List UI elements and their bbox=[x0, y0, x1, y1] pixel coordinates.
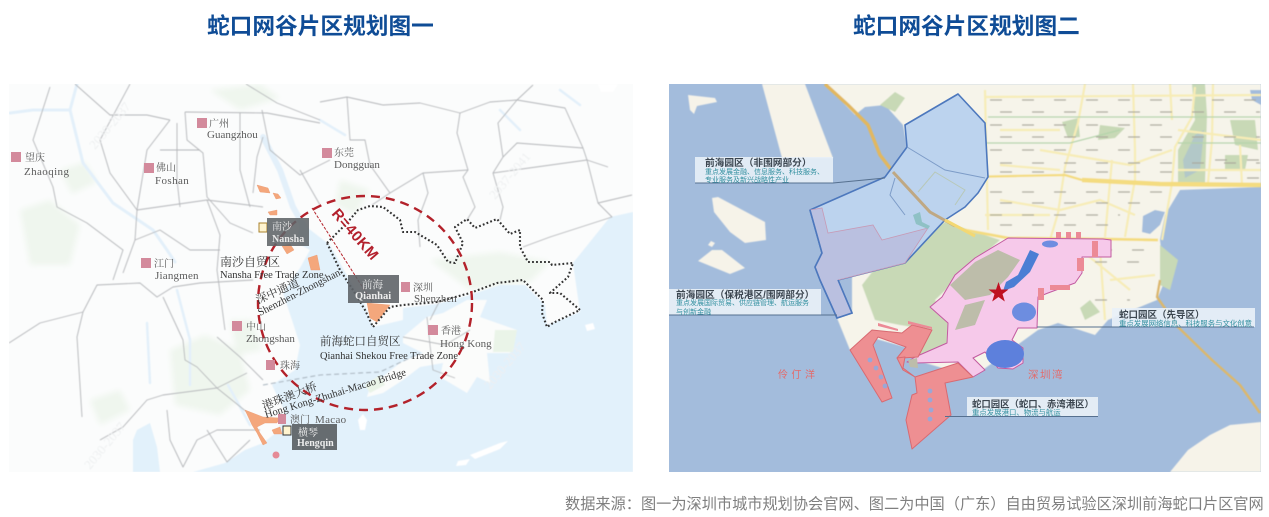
callout: Qianhai non-bonded: 重点发展金融、信息服务、科技服务、 bbox=[705, 167, 824, 176]
city labels bbox=[11, 117, 492, 426]
callout: Qianhai bonded bbox=[669, 288, 837, 316]
label: Foshan: Foshan bbox=[155, 175, 189, 187]
icon: airport dot bbox=[272, 452, 280, 458]
dotted boundary bbox=[327, 206, 580, 327]
callout: Qianhai non-bonded: 前海园区（非围网部分） bbox=[705, 156, 812, 169]
label: Dongguan: Dongguan bbox=[334, 159, 380, 171]
callout: Qianhai bonded: 与创新金融 bbox=[676, 307, 711, 316]
zone: Shekou pink pioneer area bbox=[907, 238, 1111, 377]
watermark: 2030-2037 bbox=[86, 99, 134, 152]
islands bbox=[688, 95, 1261, 472]
coastal highway bbox=[825, 84, 893, 172]
label: Qianhai Shekou free trade zone: 前海蛇口自贸区 bbox=[320, 334, 400, 348]
label: Jiangmen: Jiangmen bbox=[155, 270, 199, 282]
sea bbox=[193, 212, 633, 472]
grey hills bbox=[908, 250, 1020, 368]
label: Foshan: 佛山 bbox=[156, 161, 176, 174]
panel: regional map one bbox=[9, 84, 633, 472]
label: Hong Kong bbox=[428, 324, 492, 350]
watermark: 2037-2041 bbox=[486, 149, 534, 202]
label: Shenzhen-Zhongshan channel: 深中通道 bbox=[254, 275, 302, 307]
marker: Qianhai: 前海 bbox=[362, 278, 383, 291]
callout: Shekou pioneer: 蛇口园区（先导区） bbox=[1119, 309, 1205, 321]
city roads bbox=[985, 84, 1261, 320]
label: radius 40km: R=40KM bbox=[328, 205, 382, 264]
callout: Shekou ports: 重点发展港口、物流与航运 bbox=[972, 408, 1061, 417]
label: Jiangmen bbox=[141, 257, 199, 282]
label: Guangzhou: Guangzhou bbox=[207, 129, 258, 141]
label: Zhaoqing bbox=[11, 151, 69, 178]
label: Zhongshan bbox=[232, 320, 295, 345]
label: Zhongshan: 中山 bbox=[246, 320, 266, 333]
zone: blue circle south bbox=[986, 340, 1024, 368]
label: Hong Kong-Zhuhai-Macao bridge: 港珠澳大桥 bbox=[260, 379, 319, 413]
radius line bbox=[312, 208, 372, 302]
mainland bbox=[825, 84, 1261, 377]
label: Nansha free trade zone: 南沙自贸区 bbox=[220, 254, 280, 269]
callout: Shekou ports bbox=[945, 397, 1098, 417]
label: Zhaoqing: Zhaoqing bbox=[24, 166, 69, 178]
green areas bbox=[862, 84, 1258, 358]
label: Dongguan bbox=[322, 146, 380, 171]
dashed 40km circle bbox=[258, 196, 472, 410]
zone: blue strip bbox=[1003, 250, 1039, 291]
label: Zhuhai bbox=[266, 359, 300, 372]
bridge line bbox=[263, 353, 420, 385]
label: Shenzhen: 深圳 bbox=[413, 281, 433, 294]
label: Hong Kong: 香港 bbox=[441, 324, 461, 337]
callout: Shekou pioneer: 重点发展网络信息、科技服务与文化创意 bbox=[1119, 319, 1252, 328]
label: Qianhai Shekou free trade zone bbox=[320, 334, 458, 362]
label: Qianhai Shekou free trade zone: Qianhai Shekou Free Trade Zone bbox=[320, 351, 458, 362]
sea label: Shenzhen bay: 深圳湾 bbox=[1028, 368, 1064, 381]
label: Nansha free trade zone: Nansha Free Trade Zone bbox=[220, 270, 324, 281]
label: Macao: 澳门 bbox=[290, 413, 310, 426]
red boundary tags bbox=[878, 232, 1098, 331]
sea label: west: 伶仃洋 bbox=[778, 368, 818, 381]
watermark: 2030-2037 bbox=[481, 339, 529, 392]
label: Guangzhou: 广州 bbox=[209, 117, 229, 130]
marker: Hengqin bbox=[283, 424, 337, 450]
rivers bbox=[10, 84, 580, 425]
marker: Qianhai bbox=[348, 275, 399, 303]
bridge road bbox=[1157, 280, 1260, 413]
label: Shenzhen-Zhongshan channel: Shenzhen-Zhongshan bbox=[256, 267, 343, 319]
callout: Qianhai bonded: 重点发展国际贸易、供应链管理、航运服务 bbox=[676, 298, 809, 307]
callout: Shekou ports: 蛇口园区（蛇口、赤湾港区） bbox=[972, 398, 1094, 410]
map place markers bbox=[990, 100, 1261, 300]
callout: Qianhai bonded: 前海园区（保税港区/围网部分） bbox=[676, 288, 814, 301]
zone: Qianhai non-bonded area bbox=[810, 94, 988, 318]
callout: Qianhai non-bonded bbox=[695, 156, 885, 184]
zone: blue circle north bbox=[1012, 302, 1036, 322]
callout: Shekou pioneer bbox=[1037, 308, 1255, 328]
label: Dongguan: 东莞 bbox=[334, 146, 354, 159]
label: Jiangmen: 江门 bbox=[154, 257, 174, 270]
panel: district map two bbox=[669, 84, 1261, 472]
icon: red star bbox=[988, 282, 1008, 302]
map two: land and roads bbox=[688, 84, 1261, 472]
label: Zhuhai: 珠海 bbox=[280, 359, 300, 372]
marker: Hengqin: 横琴 bbox=[298, 426, 318, 439]
marker: Hengqin: Hengqin bbox=[297, 438, 334, 449]
watermark bbox=[81, 99, 534, 472]
label: Macao: Macao bbox=[315, 414, 347, 426]
title: map two: 蛇口网谷片区规划图二 bbox=[853, 13, 1080, 39]
label: Nansha free trade zone bbox=[220, 254, 324, 281]
label: Hong Kong: Hong Kong bbox=[440, 338, 492, 350]
lakes bbox=[1142, 90, 1261, 234]
islands and Hong Kong bbox=[367, 300, 517, 397]
marker: Qianhai: Qianhai bbox=[355, 291, 391, 302]
label: Hong Kong-Zhuhai-Macao bridge: Hong Kong-Zhuhai-Macao Bridge bbox=[264, 367, 408, 421]
marker: Nansha: 南沙 bbox=[272, 220, 293, 233]
highways bbox=[9, 84, 632, 467]
label: Zhaoqing: 望庆 bbox=[25, 151, 45, 164]
zone: Shekou and Chiwan port area bbox=[850, 325, 973, 449]
label: Foshan bbox=[144, 161, 189, 187]
label: Guangzhou bbox=[197, 117, 258, 141]
label: Shenzhen: Shenzhen bbox=[414, 293, 457, 305]
label: Zhongshan: Zhongshan bbox=[246, 333, 295, 345]
zone labels bbox=[220, 254, 458, 421]
title: map one: 蛇口网谷片区规划图一 bbox=[207, 13, 434, 39]
reclaimed land bbox=[762, 84, 833, 158]
callout: Qianhai non-bonded: 专业服务及新兴战略性产业 bbox=[705, 175, 789, 184]
label: Macao bbox=[278, 413, 347, 426]
label: Shenzhen bbox=[401, 281, 457, 305]
map one: land, sea and roads bbox=[9, 84, 633, 472]
main yellow roads bbox=[965, 175, 1261, 240]
zone: blue oval top bbox=[1042, 240, 1058, 248]
marker: Nansha bbox=[259, 218, 309, 246]
source note: 数据来源：图一为深圳市城市规划协会官网、图二为中国（广东）自由贸易试验区深圳前海蛇口片区官网 bbox=[565, 496, 1264, 513]
orange free trade zones bbox=[245, 185, 390, 445]
watermark: 2030-2037 bbox=[81, 419, 129, 472]
marker: Nansha: Nansha bbox=[272, 234, 304, 245]
